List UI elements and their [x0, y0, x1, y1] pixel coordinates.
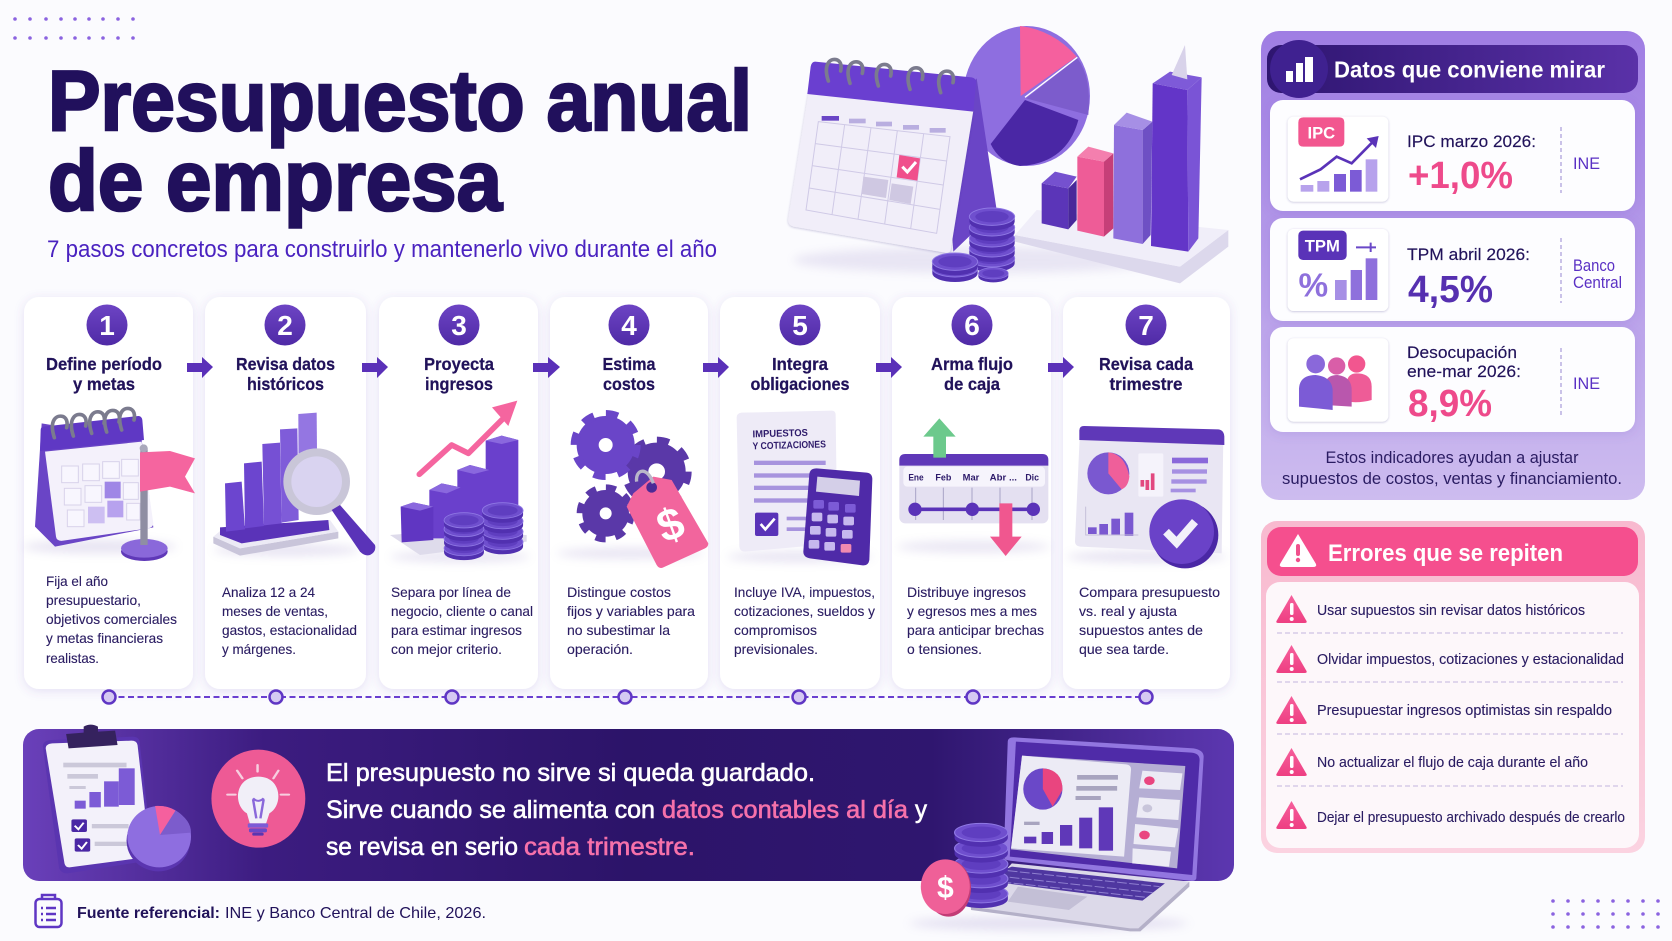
step 2 heading: Revisa datos [236, 354, 335, 374]
step 6 heading: de caja [944, 374, 1000, 394]
step 7 text: que sea tarde. [1079, 641, 1169, 657]
icon: TPM chart: TPM [1305, 237, 1340, 256]
step 3 text: con mejor criterio. [391, 641, 502, 657]
icon: cash flow timeline with arrows: Ene [908, 472, 924, 482]
panel: step 2 [205, 297, 375, 689]
panel: step 1 [23, 297, 195, 689]
step 1 text: y metas financieras [46, 630, 163, 646]
icon: laptop with coins [910, 737, 1204, 931]
icon: cash flow timeline with arrows: Mar [963, 472, 980, 482]
step 2 number: 2 [277, 310, 293, 341]
step 6 text: o tensiones. [907, 641, 982, 657]
icon: gears with price tag: $ [650, 496, 691, 553]
error 5 [1276, 801, 1625, 829]
icon: cash flow timeline with arrows: Dic [1025, 472, 1039, 482]
error 3 [1276, 696, 1612, 724]
icon: IPC chart: IPC [1307, 124, 1335, 143]
error 5: Dejar el presupuesto archivado después de crearlo [1317, 810, 1625, 826]
step 7 number: 7 [1138, 310, 1154, 341]
error 2 [1276, 645, 1624, 673]
step 1 text: objetivos comerciales [46, 611, 177, 627]
panel: errores que se repiten [1261, 521, 1645, 853]
indicator: IPC [1270, 100, 1635, 211]
icon: growth bars, coins and arrow [390, 401, 530, 562]
error 3: Presupuestar ingresos optimistas sin respaldo [1317, 703, 1612, 719]
indicator: desocupacion: Desocupación [1407, 343, 1517, 362]
step 6 text [907, 584, 1044, 657]
icon: gears with price tag [557, 414, 708, 568]
panel: datos que conviene mirar [1261, 31, 1645, 500]
panel header: Datos que conviene mirar [1334, 56, 1605, 82]
icon: dashboard with check badge [1067, 426, 1227, 568]
step 3 heading: ingresos [425, 374, 493, 394]
step 4 text: fijos y variables para [567, 603, 695, 619]
step 1 number: 1 [99, 310, 115, 341]
decorative dots top-left [13, 17, 135, 40]
banner message: se revisa en serio [326, 833, 518, 861]
step 7 text: Compara presupuesto [1079, 584, 1220, 600]
step 2 heading: históricos [247, 374, 324, 394]
panel header [1267, 40, 1638, 98]
errors list [1266, 582, 1639, 848]
icon: light bulb [211, 750, 305, 848]
step 5 heading [750, 354, 850, 394]
step 4 heading: costos [603, 374, 655, 394]
error 1 [1276, 595, 1585, 623]
step 3 number: 3 [451, 310, 467, 341]
step 4 heading: Estima [602, 354, 656, 374]
arrows between steps [187, 357, 1074, 378]
step 6 heading [931, 354, 1013, 394]
error 4 [1276, 748, 1588, 776]
hero coins [932, 208, 1015, 282]
error 4: No actualizar el flujo de caja durante el año [1317, 755, 1588, 771]
step 1 text: presupuestario, [46, 592, 141, 608]
step 6 text: para anticipar brechas [907, 622, 1044, 638]
step 4 text: no subestimar la [567, 622, 670, 638]
indicator: desocupacion: 8,9% [1408, 383, 1492, 425]
step 1 heading: y metas [73, 374, 135, 394]
hero calendar [788, 60, 997, 253]
step 6 heading: Arma flujo [931, 354, 1013, 374]
step 2 text: gastos, estacionalidad [222, 622, 357, 638]
step 4 text: operación. [567, 641, 633, 657]
step 6 text: Distribuye ingresos [907, 584, 1026, 600]
indicator: IPC: INE [1573, 154, 1600, 173]
indicator: desocupacion [1270, 327, 1635, 432]
step 5 text: cotizaciones, sueldos y [734, 603, 875, 619]
step 5 text: Incluye IVA, impuestos, [734, 584, 875, 600]
icon: clipboard list [36, 895, 62, 927]
step 4 heading [602, 354, 656, 394]
step 4 text: Distingue costos [567, 584, 671, 600]
errors header [1267, 527, 1638, 576]
panel: banner [23, 725, 1234, 931]
hero pie chart [963, 26, 1090, 166]
step 3 heading [424, 354, 494, 394]
step 1 heading: Define período [46, 354, 162, 374]
icon: warning [1280, 534, 1316, 567]
title [48, 54, 752, 229]
indicator: desocupacion: INE [1573, 374, 1600, 393]
step 4 number [608, 304, 650, 346]
step 1 text [46, 573, 177, 666]
step 5 heading: obligaciones [750, 374, 850, 394]
icon: IPC chart [1288, 117, 1388, 202]
step 5 number [780, 304, 820, 346]
indicator: TPM: TPM abril 2026: [1407, 245, 1530, 264]
icon: TPM chart [1288, 229, 1388, 311]
icon: tax document with calculator [727, 411, 873, 565]
error 1: Usar supuestos sin revisar datos históricos [1317, 603, 1585, 619]
title: de empresa [48, 134, 503, 229]
indicator: TPM: 4,5% [1408, 269, 1493, 311]
title: Presupuesto anual [48, 54, 752, 149]
indicator: IPC: +1,0% [1408, 155, 1513, 197]
indicator: TPM: Banco [1573, 256, 1615, 275]
step 3 text: para estimar ingresos [391, 622, 522, 638]
step 7 text [1079, 584, 1220, 657]
step 7 heading: trimestre [1110, 374, 1183, 394]
step 2 text [222, 584, 357, 657]
panel caption [1282, 448, 1622, 488]
step 1 heading [46, 354, 162, 394]
step 7 heading: Revisa cada [1099, 354, 1193, 374]
step 4 number: 4 [621, 310, 637, 341]
icon: tax document with calculator: Y COTIZACIONES [752, 439, 826, 452]
icon: cash flow timeline with arrows: Abr ... [990, 472, 1017, 482]
banner message: y [915, 796, 927, 824]
error 2: Olvidar impuestos, cotizaciones y estacionalidad [1317, 652, 1624, 668]
banner message: Sirve cuando se alimenta con [326, 796, 655, 824]
panel caption: supuestos de costos, ventas y financiamiento. [1282, 469, 1622, 488]
step 3 number [438, 304, 480, 346]
panel: step 7 [1063, 297, 1230, 689]
step 6 number: 6 [964, 310, 980, 341]
step 1 text: realistas. [46, 650, 99, 666]
errors header: Errores que se repiten [1328, 540, 1563, 567]
step 6 text: y egresos mes a mes [907, 603, 1037, 619]
step 7 heading [1099, 354, 1193, 394]
step 3 text: Separa por línea de [391, 584, 511, 600]
step 1 text: Fija el año [46, 573, 108, 589]
panel: step 6 [892, 297, 1051, 689]
icon: TPM chart: % [1299, 268, 1328, 305]
step 2 heading [236, 354, 335, 394]
indicator: desocupacion: ene-mar 2026: [1407, 362, 1521, 381]
hero bar chart [1015, 45, 1228, 283]
source note: INE y Banco Central de Chile, 2026. [225, 905, 486, 922]
step 3 heading: Proyecta [424, 354, 494, 374]
icon: cash flow timeline with arrows: Feb [935, 472, 952, 482]
panel: step 3 [379, 297, 538, 689]
icon: cash flow timeline with arrows [897, 418, 1050, 556]
source note [36, 895, 486, 927]
timeline [102, 690, 1152, 704]
step 2 number [264, 304, 306, 346]
step 5 text: compromisos [734, 622, 817, 638]
banner message: datos contables al día [662, 796, 908, 824]
icon: bars [1286, 57, 1313, 82]
icon: clipboard with pie [43, 725, 191, 873]
banner message [326, 759, 927, 861]
step 2 text: meses de ventas, [222, 603, 328, 619]
step 5 text [734, 584, 875, 657]
indicator: TPM: Central [1573, 273, 1622, 292]
step 1 number [86, 304, 128, 346]
step 3 text [391, 584, 533, 657]
indicator: IPC: IPC marzo 2026: [1407, 132, 1536, 151]
icon: people [1288, 338, 1388, 422]
icon: calendar with flag [23, 409, 195, 561]
subtitle: 7 pasos concretos para construirlo y mantenerlo vivo durante el año [47, 236, 717, 263]
step 3 text: negocio, cliente o canal [391, 603, 533, 619]
hero illustration [788, 26, 1228, 283]
step 7 text: vs. real y ajusta [1079, 603, 1177, 619]
step 7 number [1126, 304, 1166, 346]
banner message: El presupuesto no sirve si queda guardado. [326, 759, 815, 787]
banner message: cada trimestre. [524, 833, 695, 861]
step 7 text: supuestos antes de [1079, 622, 1203, 638]
step 6 number [952, 304, 992, 346]
step 2 text: Analiza 12 a 24 [222, 584, 315, 600]
source note: Fuente referencial: [77, 905, 220, 922]
indicator: TPM [1270, 218, 1635, 321]
step 5 heading: Integra [772, 354, 828, 374]
icon: tax document with calculator: IMPUESTOS [752, 428, 808, 440]
step 5 text: previsionales. [734, 641, 818, 657]
icon: laptop with coins: $ [937, 871, 954, 904]
step 5 number: 5 [792, 310, 808, 341]
decorative dots bottom-right [1551, 899, 1660, 929]
step 2 text: y márgenes. [222, 641, 296, 657]
panel: step 4 [550, 297, 708, 689]
icon: bars with magnifier [213, 413, 375, 556]
panel: step 5 [720, 297, 880, 689]
panel caption: Estos indicadores ayudan a ajustar [1326, 448, 1579, 467]
step 4 text [567, 584, 695, 657]
